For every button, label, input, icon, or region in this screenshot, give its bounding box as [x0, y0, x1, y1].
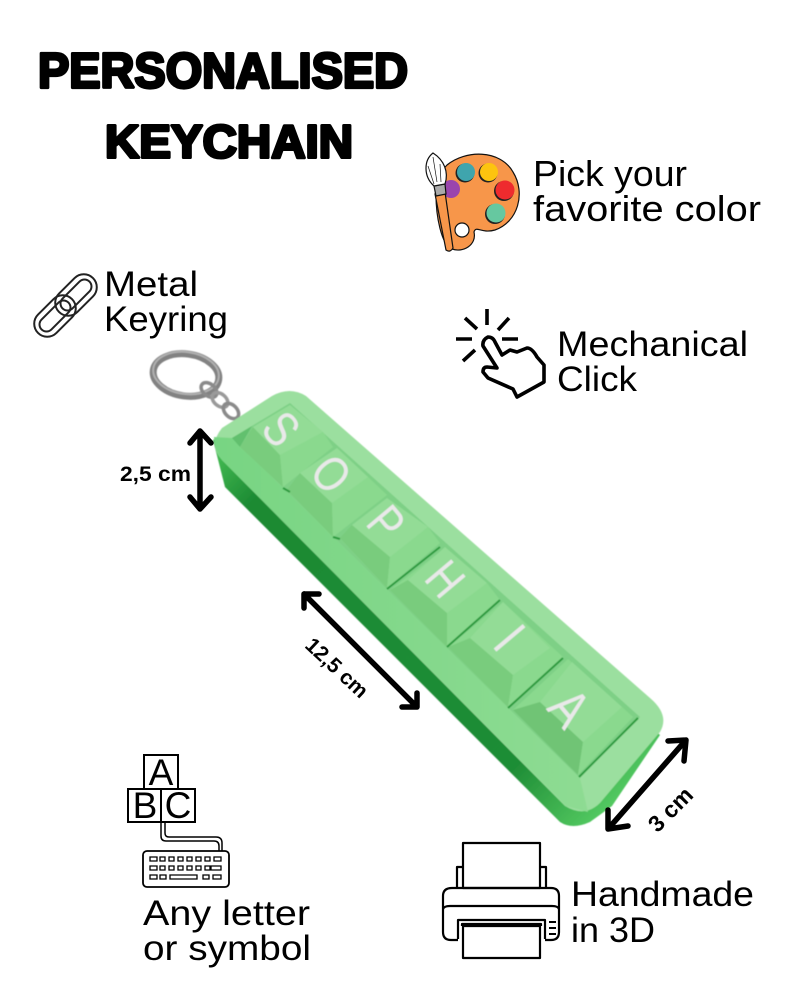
text: metal keyring: Metal [104, 265, 198, 304]
arrow: height dimension [190, 431, 211, 509]
text: any letter or symbol [143, 894, 311, 968]
letter blocks: B [133, 785, 157, 826]
key O [287, 444, 387, 537]
keyboard [143, 851, 229, 887]
key S: S [251, 401, 311, 457]
icon: 3D printer [443, 843, 559, 958]
arrow: length dimension [304, 594, 417, 707]
keychain product [150, 348, 663, 826]
text: metal keyring [104, 265, 228, 339]
text: mechanical click: Mechanical [557, 325, 748, 364]
key A [513, 659, 633, 775]
keychain side wall [213, 400, 660, 826]
text: pick your favorite color: favorite color [533, 188, 761, 229]
key H [390, 547, 500, 647]
text: any letter or symbol: or symbol [143, 929, 311, 968]
key P: P [356, 495, 416, 551]
text: handmade in 3D: in 3D [571, 911, 655, 950]
text: any letter or symbol: Any letter [143, 894, 310, 933]
key S [240, 401, 333, 487]
arrow: width dimension [608, 740, 686, 829]
label: 2,5 cm: 2,5 cm [120, 463, 191, 486]
text: pick your favorite color [533, 153, 761, 229]
label: 3 cm: 3 cm [643, 782, 698, 837]
title: PERSONALISED [38, 43, 408, 98]
key O: O [300, 444, 363, 504]
letter blocks: C [165, 785, 191, 826]
gaps between keys [283, 488, 638, 777]
label: 12,5 cm: 12,5 cm [300, 634, 372, 703]
keychain top face [215, 391, 663, 811]
key H: H [414, 550, 476, 608]
key I: I [482, 613, 537, 662]
letter blocks: A [149, 752, 174, 793]
text: metal keyring: Keyring [104, 300, 228, 339]
icon: paint palette [426, 153, 519, 251]
key I [448, 602, 563, 707]
metal ring and chain [150, 348, 242, 422]
icon: letter blocks and keyboard [128, 752, 229, 887]
key A: A [536, 677, 603, 740]
text: pick your favorite color: Pick your [533, 153, 687, 194]
text: mechanical click [557, 325, 748, 399]
key well [232, 403, 640, 778]
cable [161, 822, 222, 851]
text: handmade in 3D [571, 875, 754, 950]
title [38, 43, 408, 168]
letter blocks [128, 752, 195, 826]
title: KEYCHAIN [105, 117, 353, 168]
icon: clicking hand [456, 309, 544, 397]
text: handmade in 3D: Handmade [571, 875, 754, 914]
icon: chain link [29, 269, 102, 342]
key P [340, 495, 440, 588]
text: mechanical click: Click [557, 360, 638, 399]
lower rim shading [214, 437, 588, 812]
